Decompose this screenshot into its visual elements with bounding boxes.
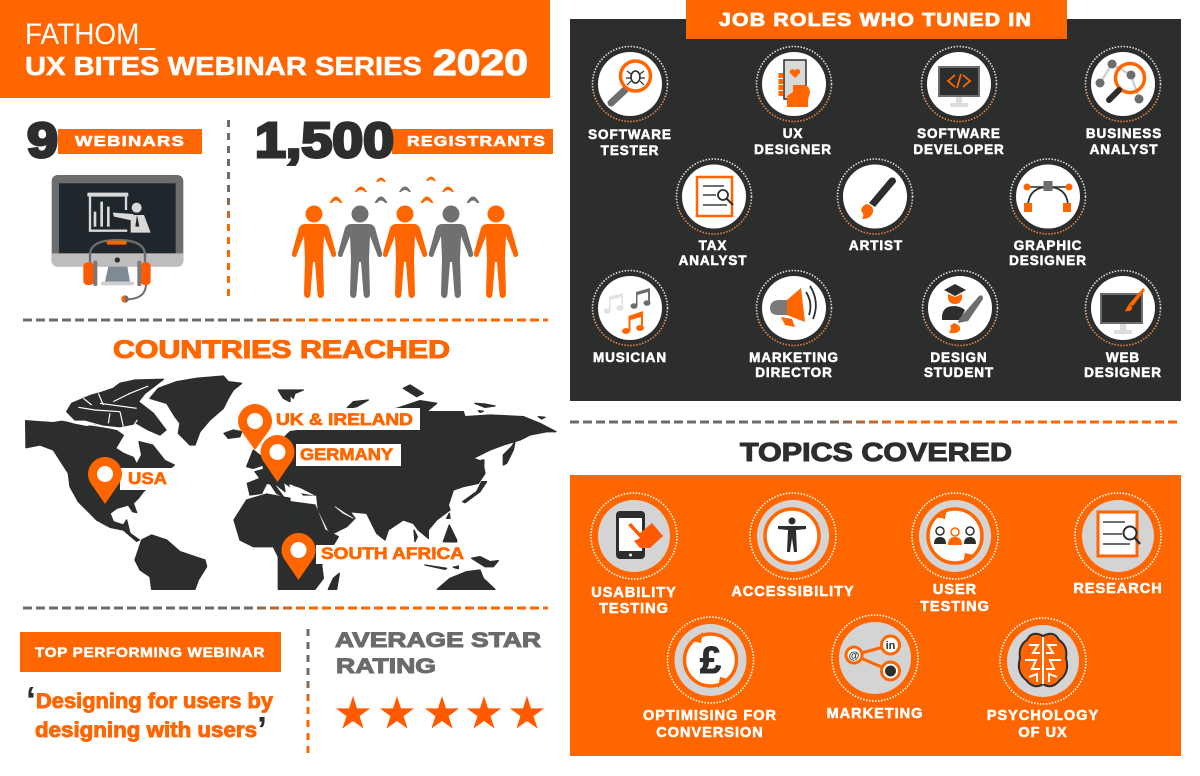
pin: Germany <box>260 435 294 482</box>
topic: usability testing <box>591 493 677 617</box>
role: marketing director: MARKETING <box>749 350 839 365</box>
role: design student: STUDENT <box>924 365 994 380</box>
role: software tester: SOFTWARE <box>588 127 672 142</box>
role: artist: ARTIST <box>849 238 903 253</box>
icon: monitor with headset <box>52 175 183 303</box>
heading: average star rating: AVERAGE STAR <box>335 629 541 652</box>
role: marketing director: DIRECTOR <box>755 365 833 380</box>
role: musician <box>592 270 668 365</box>
topic: psychology of UX: PSYCHOLOGY <box>987 708 1099 724</box>
map: western hemisphere <box>26 376 290 589</box>
stat: 9 webinars: 9 <box>27 114 58 168</box>
role: software developer <box>913 46 1005 157</box>
role: UX designer: DESIGNER <box>754 142 832 157</box>
heading: average star rating: RATING <box>336 655 436 678</box>
role: software tester <box>588 46 672 158</box>
topic: marketing <box>827 615 923 722</box>
heading: countries reached: COUNTRIES REACHED <box>113 336 450 364</box>
role: business analyst <box>1086 46 1162 157</box>
heading: average star rating <box>335 629 541 678</box>
role: tax analyst <box>676 159 752 268</box>
panel: top performing webinar: TOP PERFORMING WEBINAR <box>35 644 265 660</box>
label: USA <box>120 468 174 490</box>
pin: UK and Ireland <box>238 404 272 450</box>
topic: marketing: MARKETING <box>827 706 923 722</box>
role: artist <box>838 159 912 253</box>
topic: psychology of UX <box>987 618 1099 741</box>
topic: usability testing: TESTING <box>599 601 669 617</box>
star rating: five stars <box>336 696 544 729</box>
role: musician: MUSICIAN <box>593 350 667 365</box>
stat: 1,500 registrants <box>255 114 553 168</box>
world map <box>26 376 556 589</box>
panel: topics covered <box>570 475 1181 756</box>
title year: 2020 <box>433 42 528 83</box>
role: web designer: DESIGNER <box>1084 365 1162 380</box>
label: South Africa: SOUTH AFRICA <box>321 544 464 563</box>
quote: webinar title <box>26 679 273 750</box>
quote: webinar title: ’ <box>257 709 267 750</box>
label: USA: USA <box>128 469 167 488</box>
topic: accessibility <box>731 493 855 600</box>
topic: user testing: TESTING <box>920 599 990 615</box>
topic: accessibility: ACCESSIBILITY <box>731 584 855 600</box>
stat: 1,500 registrants: REGISTRANTS <box>407 133 546 150</box>
role: graphic designer: DESIGNER <box>1009 253 1087 268</box>
role: design student <box>922 270 998 380</box>
stat: 9 webinars: WEBINARS <box>75 133 185 150</box>
role: tax analyst: ANALYST <box>679 253 747 268</box>
topic: optimising for conversion: £ <box>700 640 721 682</box>
heading: topics covered: TOPICS COVERED <box>740 437 1012 467</box>
role: software developer: SOFTWARE <box>917 126 1001 141</box>
panel: top performing webinar <box>20 632 281 672</box>
topic: research: RESEARCH <box>1073 581 1163 597</box>
pin: USA <box>88 457 122 504</box>
heading: job roles: JOB ROLES WHO TUNED IN <box>719 10 1032 30</box>
role: design student: DESIGN <box>930 350 988 365</box>
topic: marketing: in <box>886 640 896 652</box>
role: web designer: WEB <box>1106 350 1140 365</box>
topic: optimising for conversion <box>643 617 777 741</box>
topic: optimising for conversion: CONVERSION <box>656 725 764 741</box>
label: Germany: GERMANY <box>300 445 394 464</box>
topic: user testing: USER <box>933 582 977 598</box>
role: graphic designer: GRAPHIC <box>1014 238 1082 253</box>
stat: 1,500 registrants: 1,500 <box>255 114 394 168</box>
role: tax analyst: TAX <box>699 238 727 253</box>
role: graphic designer <box>1009 159 1087 268</box>
header banner <box>0 0 550 98</box>
quote: webinar title: ‘ <box>26 679 36 720</box>
role: software developer: DEVELOPER <box>913 142 1005 157</box>
map: eastern hemisphere <box>263 385 556 589</box>
role: software tester: TESTER <box>601 143 659 158</box>
topic: research <box>1073 493 1163 597</box>
role: business analyst: BUSINESS <box>1086 126 1162 141</box>
topic: user testing <box>912 493 998 615</box>
logo: Fathom: FATHOM_ <box>25 18 156 51</box>
topic: marketing: @ <box>849 650 860 662</box>
label: UK and Ireland: UK & IRELAND <box>276 410 413 429</box>
quote: webinar title: designing with users <box>35 719 257 742</box>
role: UX designer: UX <box>783 126 803 141</box>
heading: job roles <box>686 0 1067 39</box>
pin: South Africa <box>282 533 316 580</box>
title: UX BITES WEBINAR SERIES <box>25 51 422 81</box>
role: marketing director <box>749 270 839 380</box>
topic: psychology of UX: OF UX <box>1018 725 1068 741</box>
topic: optimising for conversion: OPTIMISING FOR <box>643 708 777 724</box>
stat: 9 webinars <box>27 114 202 168</box>
divider: vertical dashed <box>227 120 230 299</box>
role: web designer <box>1084 270 1162 380</box>
quote: webinar title: Designing for users by <box>36 690 273 713</box>
role: business analyst: ANALYST <box>1090 142 1158 157</box>
panel: job roles <box>570 0 1181 401</box>
icon: crowd of people <box>292 176 518 298</box>
role: UX designer <box>754 46 832 157</box>
topic: usability testing: USABILITY <box>591 585 677 601</box>
